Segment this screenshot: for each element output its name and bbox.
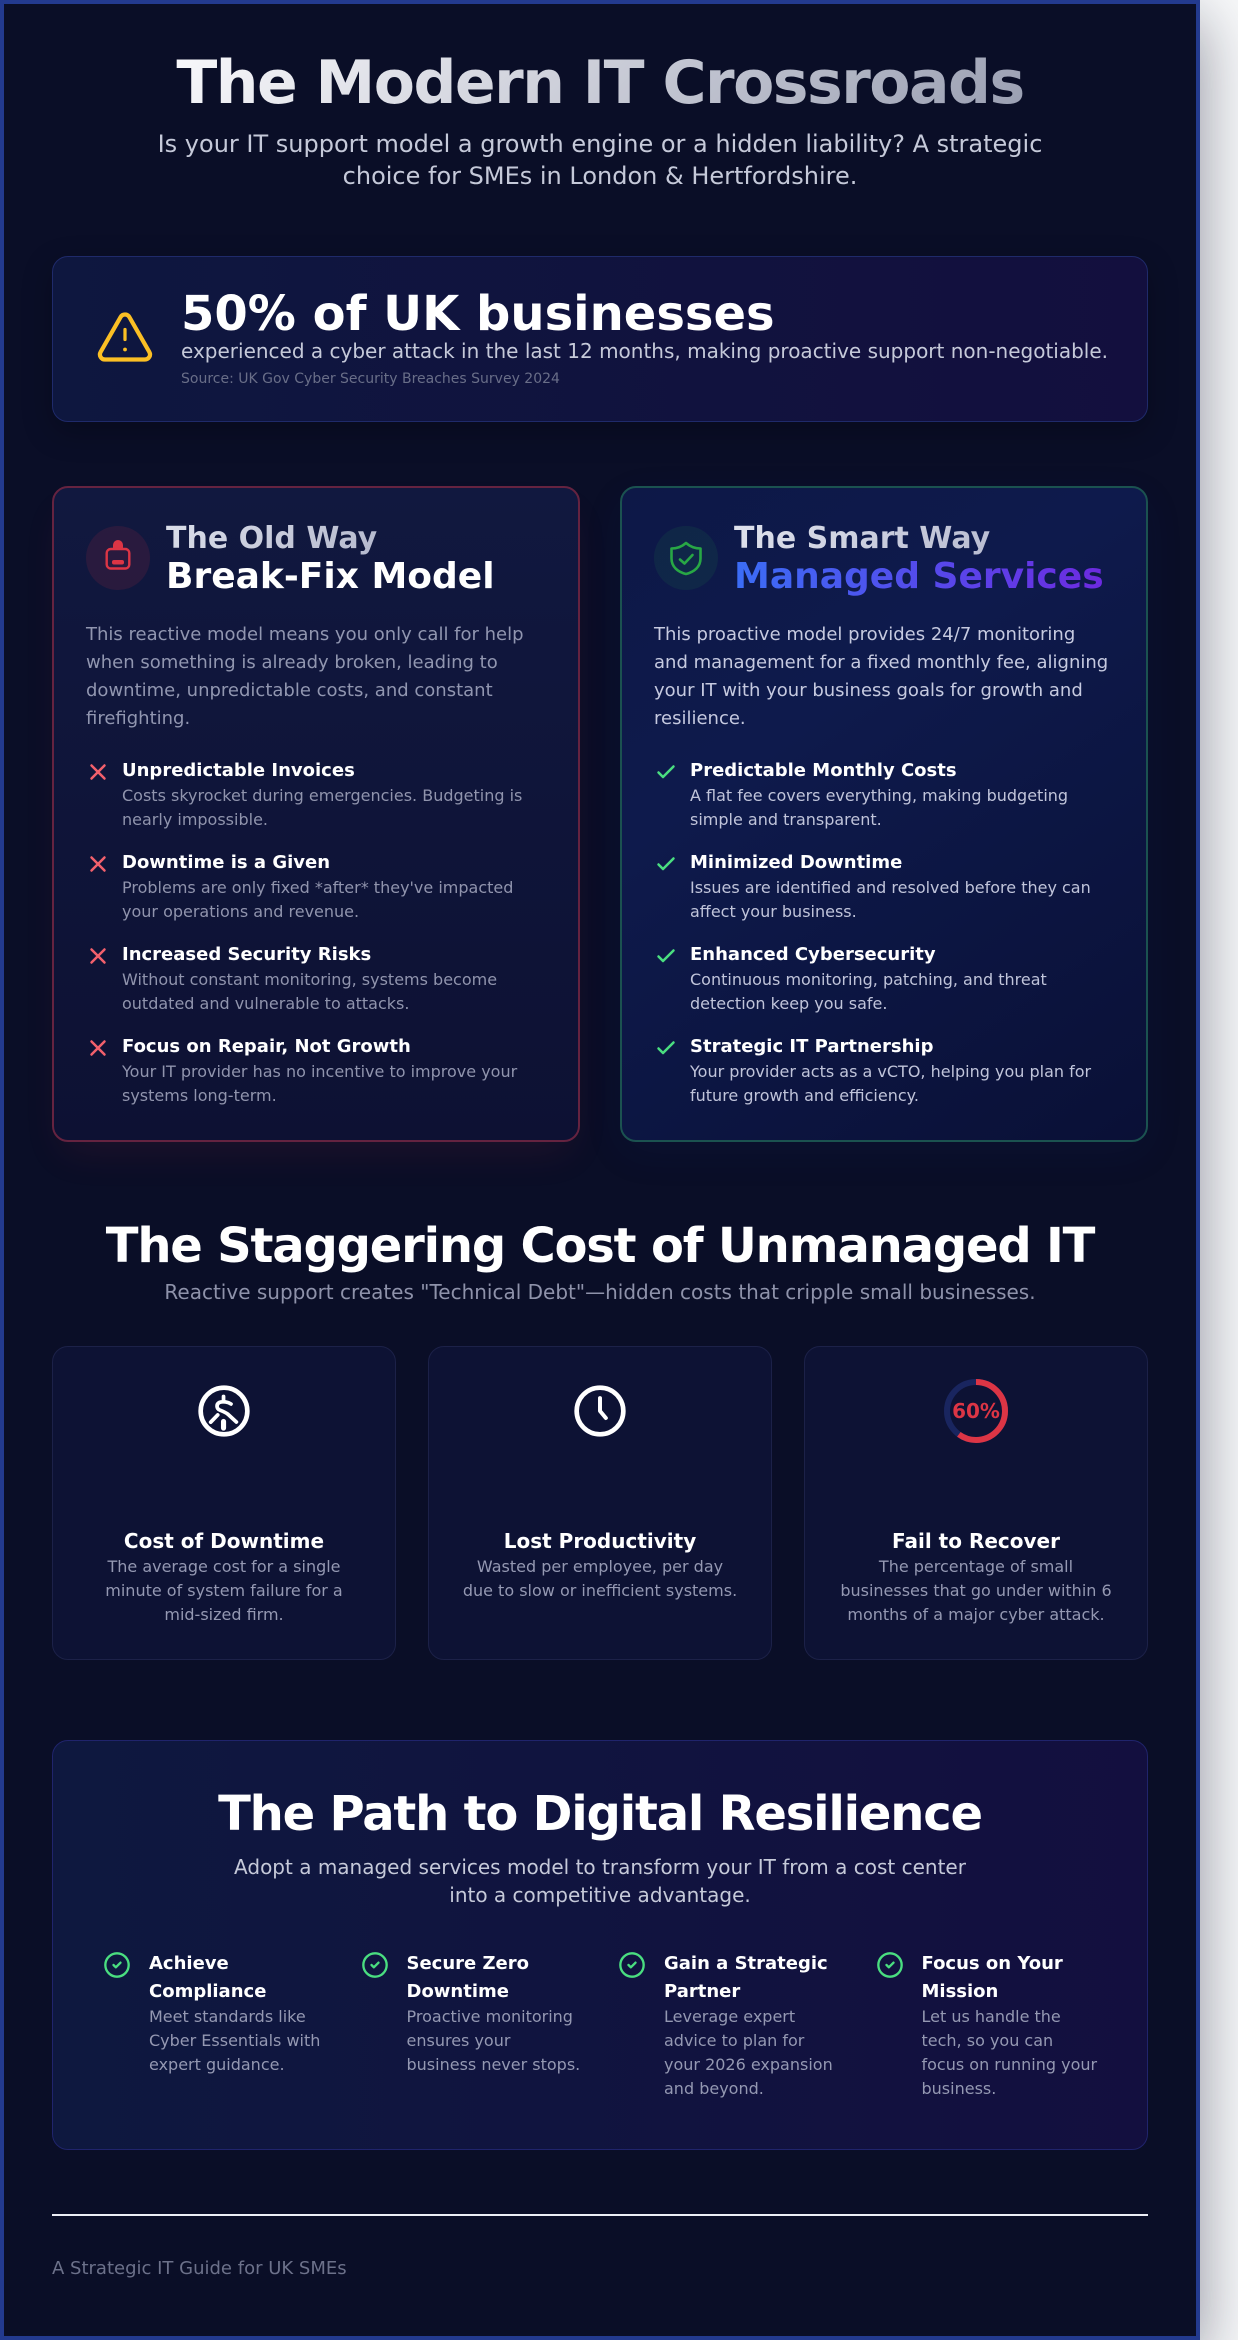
card description: Wasted per employee, per day bbox=[477, 1557, 723, 1576]
step: secure zero downtime bbox=[360, 1949, 600, 2101]
item: unpredictable invoices bbox=[90, 760, 522, 829]
step text: tech, so you can bbox=[922, 2031, 1053, 2050]
item text bbox=[690, 1036, 1092, 1105]
step text: business. bbox=[922, 2079, 996, 2098]
item: downtime is a given bbox=[90, 852, 513, 921]
item text: A flat fee covers everything, making budgeting bbox=[690, 786, 1068, 805]
intro paragraph bbox=[654, 624, 1108, 729]
step text bbox=[406, 1949, 580, 2077]
step text bbox=[149, 1949, 320, 2077]
item: focus on repair bbox=[90, 1036, 518, 1105]
item text bbox=[690, 760, 1068, 829]
heading: path: The Path to Digital Resilience bbox=[218, 1786, 982, 1842]
card description: The average cost for a single bbox=[107, 1557, 341, 1576]
step text: Proactive monitoring bbox=[406, 2007, 573, 2026]
item text: detection keep you safe. bbox=[690, 994, 887, 1013]
item text: nearly impossible. bbox=[122, 810, 268, 829]
intro paragraph: This reactive model means you only call for help bbox=[86, 624, 524, 645]
intro paragraph: downtime, unpredictable costs, and constant bbox=[86, 680, 493, 701]
step text: Downtime bbox=[406, 1981, 509, 2002]
icon: warning triangle bbox=[98, 312, 152, 362]
icon: cross bbox=[90, 764, 106, 780]
panel: the old way bbox=[52, 486, 580, 1142]
icon: check bbox=[657, 765, 675, 778]
intro paragraph: when something is already broken, leading to bbox=[86, 652, 498, 673]
icon: shield check bbox=[654, 526, 718, 590]
step text: business never stops. bbox=[406, 2055, 580, 2074]
step text: Mission bbox=[922, 1981, 998, 2002]
heading: old way: Break-Fix Model bbox=[166, 556, 495, 597]
icon: circle check bbox=[360, 1951, 388, 1979]
card description bbox=[840, 1557, 1112, 1624]
step text: your 2026 expansion bbox=[664, 2055, 833, 2074]
step text: Compliance bbox=[149, 1981, 266, 2002]
card description: The percentage of small bbox=[879, 1557, 1073, 1576]
heading: old way bbox=[166, 521, 495, 597]
item text: affect your business. bbox=[690, 902, 857, 921]
stat headline: 50% of UK businesses bbox=[181, 286, 775, 342]
icon: cross bbox=[90, 948, 106, 964]
icon: circle check bbox=[103, 1951, 131, 1979]
card title: Lost Productivity bbox=[504, 1529, 696, 1553]
item text: Issues are identified and resolved before they can bbox=[690, 878, 1091, 897]
panel subtitle: Adopt a managed services model to transform your IT from a cost center bbox=[234, 1855, 966, 1879]
item text: Unpredictable Invoices bbox=[122, 760, 355, 781]
item text: Downtime is a Given bbox=[122, 852, 330, 873]
icon: broken bag bbox=[86, 526, 150, 590]
card description: months of a major cyber attack. bbox=[847, 1605, 1105, 1624]
intro paragraph bbox=[86, 624, 524, 729]
heading: smart way: The Smart Way bbox=[734, 521, 990, 556]
item text bbox=[122, 1036, 518, 1105]
item text: your operations and revenue. bbox=[122, 902, 359, 921]
item: strategic IT partnership bbox=[657, 1036, 1092, 1105]
icon: check bbox=[657, 949, 675, 962]
intro paragraph: This proactive model provides 24/7 monitoring bbox=[654, 624, 1075, 645]
item text: Increased Security Risks bbox=[122, 944, 371, 965]
step text: ensures your bbox=[406, 2031, 510, 2050]
card description: due to slow or inefficient systems. bbox=[463, 1581, 737, 1600]
item text: Focus on Repair, Not Growth bbox=[122, 1036, 411, 1057]
step text: Gain a Strategic bbox=[664, 1953, 828, 1974]
step text: Secure Zero bbox=[406, 1953, 529, 1974]
card title: Fail to Recover bbox=[892, 1529, 1060, 1553]
step text: Cyber Essentials with bbox=[149, 2031, 320, 2050]
card description: minute of system failure for a bbox=[105, 1581, 343, 1600]
icon: clock bbox=[574, 1385, 626, 1437]
step text: Achieve bbox=[149, 1953, 229, 1974]
step text: focus on running your bbox=[922, 2055, 1097, 2074]
item text: Strategic IT Partnership bbox=[690, 1036, 933, 1057]
step text: Partner bbox=[664, 1981, 740, 2002]
card description bbox=[105, 1557, 343, 1624]
panel: the smart way bbox=[620, 486, 1148, 1142]
item text: Continuous monitoring, patching, and threat bbox=[690, 970, 1047, 989]
item text: Minimized Downtime bbox=[690, 852, 902, 873]
icon: cross bbox=[90, 1040, 106, 1056]
card description: businesses that go under within 6 bbox=[840, 1581, 1112, 1600]
panel: path to digital resilience bbox=[52, 1740, 1148, 2150]
item text: Enhanced Cybersecurity bbox=[690, 944, 936, 965]
item text bbox=[690, 852, 1091, 921]
icon: cross bbox=[90, 856, 106, 872]
stat source: Source: UK Gov Cyber Security Breaches Survey 2024 bbox=[181, 371, 560, 387]
icon: circle check bbox=[618, 1951, 646, 1979]
item text: Predictable Monthly Costs bbox=[690, 760, 957, 781]
panel subtitle bbox=[234, 1855, 966, 1907]
item text bbox=[122, 760, 522, 829]
item text: Your IT provider has no incentive to improve your bbox=[122, 1062, 517, 1081]
step text: and beyond. bbox=[664, 2079, 764, 2098]
icon: check bbox=[657, 1041, 675, 1054]
panel: stat banner bbox=[52, 256, 1148, 422]
icon: circle check bbox=[876, 1951, 904, 1979]
step text: Leverage expert bbox=[664, 2007, 795, 2026]
footer text: A Strategic IT Guide for UK SMEs bbox=[52, 2258, 347, 2279]
item text: Problems are only fixed *after* they've impacted bbox=[122, 878, 513, 897]
step text bbox=[922, 1949, 1097, 2101]
item text: simple and transparent. bbox=[690, 810, 882, 829]
step text: expert guidance. bbox=[149, 2055, 285, 2074]
item text bbox=[122, 944, 497, 1013]
footer divider bbox=[52, 2214, 1148, 2216]
item text bbox=[122, 852, 513, 921]
intro paragraph: your IT with your business goals for growth and bbox=[654, 680, 1083, 701]
item text: Without constant monitoring, systems become bbox=[122, 970, 497, 989]
step text bbox=[664, 1949, 833, 2101]
icon: dollar in circle bbox=[198, 1385, 250, 1437]
card description: mid-sized firm. bbox=[164, 1605, 284, 1624]
donut chart: 60%: 60% bbox=[952, 1399, 1000, 1423]
panel: lost productivity bbox=[428, 1346, 772, 1660]
card description bbox=[463, 1557, 737, 1600]
subtitle: choice for SMEs in London & Hertfordshire. bbox=[343, 162, 857, 190]
step: achieve compliance bbox=[104, 1952, 320, 2074]
donut chart: 60% bbox=[944, 1379, 1008, 1443]
icon: check bbox=[657, 857, 675, 870]
subtitle: Is your IT support model a growth engine or a hidden liability? A strategic bbox=[158, 130, 1042, 158]
intro paragraph: and management for a fixed monthly fee, aligning bbox=[654, 652, 1108, 673]
step text: Let us handle the bbox=[922, 2007, 1061, 2026]
item text bbox=[690, 944, 1047, 1013]
step text: Meet standards like bbox=[149, 2007, 306, 2026]
item text: Your provider acts as a vCTO, helping you plan for bbox=[690, 1062, 1091, 1081]
heading: smart way: Managed Services bbox=[734, 556, 1104, 597]
step: gain a strategic partner bbox=[618, 1949, 858, 2101]
item text: future growth and efficiency. bbox=[690, 1086, 919, 1105]
intro paragraph: resilience. bbox=[654, 708, 746, 729]
item: minimized downtime bbox=[657, 852, 1091, 921]
panel: fail to recover bbox=[804, 1346, 1148, 1660]
item: increased security risks bbox=[90, 944, 497, 1013]
item text: outdated and vulnerable to attacks. bbox=[122, 994, 409, 1013]
item: predictable monthly costs bbox=[657, 760, 1068, 829]
subtitle bbox=[158, 130, 1042, 190]
item text: Costs skyrocket during emergencies. Budgeting is bbox=[122, 786, 522, 805]
step text: Focus on Your bbox=[922, 1953, 1063, 1974]
item text: systems long-term. bbox=[122, 1086, 277, 1105]
card title: Cost of Downtime bbox=[124, 1529, 324, 1553]
stat description: experienced a cyber attack in the last 12 months, making proactive support non-negotiable. bbox=[181, 339, 1108, 363]
title: The Modern IT Crossroads bbox=[176, 48, 1024, 118]
panel subtitle: into a competitive advantage. bbox=[449, 1883, 751, 1907]
section subtitle: Reactive support creates "Technical Debt"—hidden costs that cripple small businesses. bbox=[164, 1280, 1036, 1304]
heading: smart way bbox=[734, 521, 1104, 597]
panel: cost of downtime bbox=[52, 1346, 396, 1660]
step: focus on your mission bbox=[876, 1949, 1116, 2101]
step text: advice to plan for bbox=[664, 2031, 804, 2050]
heading: staggering cost: The Staggering Cost of Unmanaged IT bbox=[106, 1218, 1094, 1274]
item: enhanced cybersecurity bbox=[657, 944, 1047, 1013]
intro paragraph: firefighting. bbox=[86, 708, 190, 729]
heading: old way: The Old Way bbox=[166, 521, 377, 556]
